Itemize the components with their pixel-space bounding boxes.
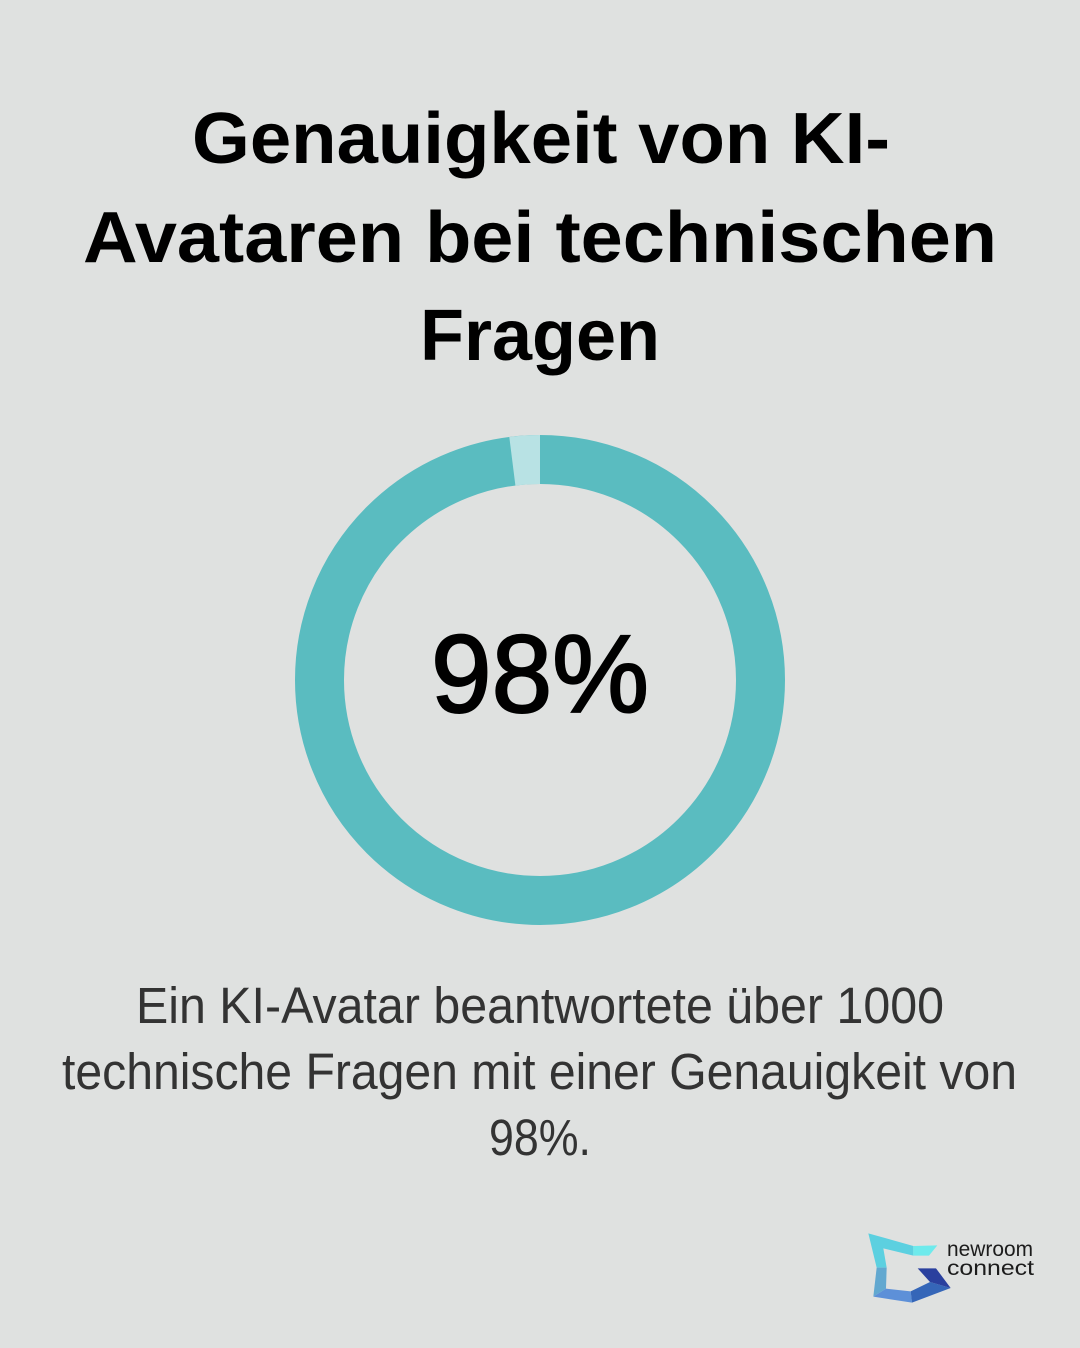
description text: technische Fragen mit einer Genauigkeit von [62, 1043, 1017, 1100]
logo wordmark: connect [947, 1257, 1034, 1280]
logo mark [868, 1233, 951, 1303]
title: Genauigkeit von KI- [192, 99, 890, 179]
donut chart: 98% [320, 435, 760, 900]
title [83, 99, 997, 376]
logo wordmark: newroom [947, 1238, 1033, 1261]
donut value: 98% [431, 613, 649, 736]
logo wordmark [947, 1238, 1034, 1280]
title: Avataren bei technischen [83, 198, 997, 278]
logo: newroom connect [868, 1233, 1034, 1303]
title: Fragen [420, 296, 660, 376]
description text: 98%. [489, 1109, 591, 1166]
description text [62, 977, 1017, 1166]
description text: Ein KI-Avatar beantwortete über 1000 [136, 977, 944, 1034]
